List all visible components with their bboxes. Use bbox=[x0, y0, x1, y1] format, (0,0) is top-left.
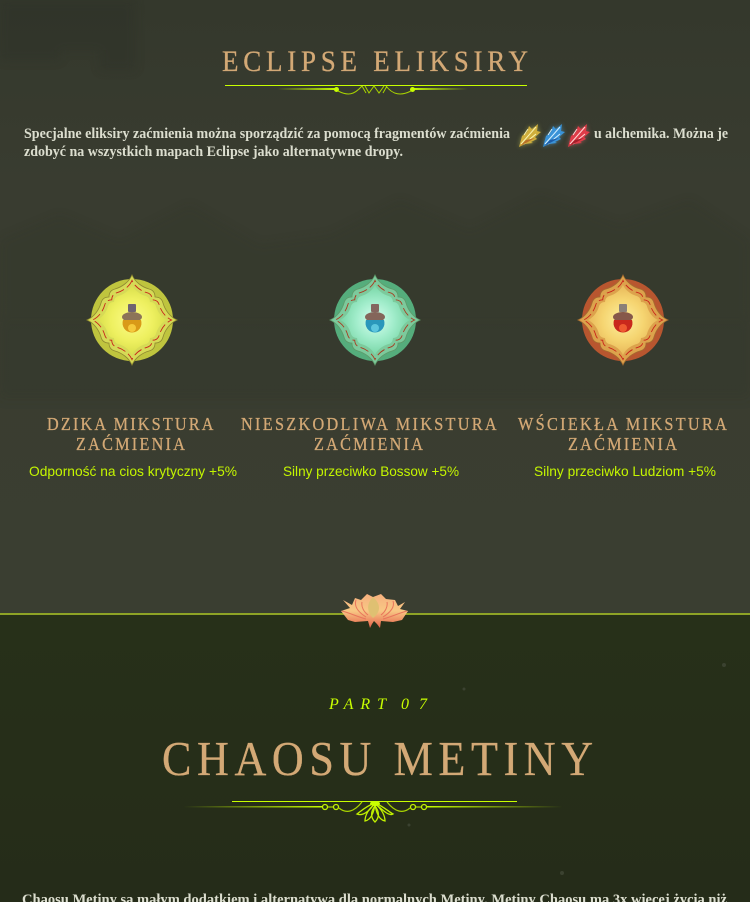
icon: yellow elixir medallion bbox=[87, 275, 177, 365]
card: Wściekła Mikstura Zaćmienia: WŚCIEKŁA MIKSTURA bbox=[518, 414, 727, 434]
card: Dzika Mikstura Zaćmienia: Odporność na cios krytyczny +5% bbox=[29, 463, 237, 479]
card: Nieszkodliwa Mikstura Zaćmienia: Silny przeciwko Bossow +5% bbox=[283, 463, 459, 479]
card: Dzika Mikstura Zaćmienia: DZIKA MIKSTURA bbox=[47, 414, 214, 434]
intro paragraph: Specjalne eliksiry zaćmienia można sporządzić za pomocą fragmentów zaćmienia bbox=[24, 126, 510, 142]
icon: yellow shard bbox=[519, 124, 541, 147]
icon: red elixir medallion bbox=[578, 275, 668, 365]
card: Dzika Mikstura Zaćmienia bbox=[29, 414, 237, 479]
part label: 07 bbox=[401, 696, 428, 713]
intro paragraph: u alchemika. Można je bbox=[594, 126, 728, 142]
title ornament bbox=[225, 86, 527, 94]
card: Dzika Mikstura Zaćmienia: ZAĆMIENIA bbox=[76, 434, 186, 454]
intro paragraph bbox=[24, 126, 728, 160]
background: temple silhouettes bbox=[0, 0, 750, 400]
heading: Chaosu Metiny: CHAOSU METINY bbox=[162, 732, 593, 787]
card: Nieszkodliwa Mikstura Zaćmienia bbox=[241, 414, 497, 479]
card: Wściekła Mikstura Zaćmienia: Silny przeciwko Ludziom +5% bbox=[534, 463, 716, 479]
title: Eclipse Eliksiry: ECLIPSE ELIKSIRY bbox=[222, 46, 528, 78]
background: floating specks bbox=[408, 663, 726, 875]
part label bbox=[328, 696, 428, 713]
background: upper section bbox=[0, 0, 750, 614]
card: Nieszkodliwa Mikstura Zaćmienia: ZAĆMIENIA bbox=[314, 434, 424, 454]
intro paragraph: zdobyć na wszystkich mapach Eclipse jako alternatywne dropy. bbox=[24, 144, 403, 160]
part label: PART bbox=[328, 696, 387, 713]
icon: blue shard bbox=[543, 124, 565, 147]
heading ornament bbox=[183, 801, 563, 822]
card: Wściekła Mikstura Zaćmienia bbox=[518, 414, 727, 479]
section divider line bbox=[0, 613, 750, 615]
card: Nieszkodliwa Mikstura Zaćmienia: NIESZKODLIWA MIKSTURA bbox=[241, 414, 497, 434]
icon: green elixir medallion bbox=[330, 275, 420, 365]
icon: lotus divider bbox=[341, 594, 408, 628]
card: Wściekła Mikstura Zaćmienia: ZAĆMIENIA bbox=[568, 434, 678, 454]
background: lower section bbox=[0, 614, 750, 902]
icon: red shard bbox=[568, 124, 590, 147]
